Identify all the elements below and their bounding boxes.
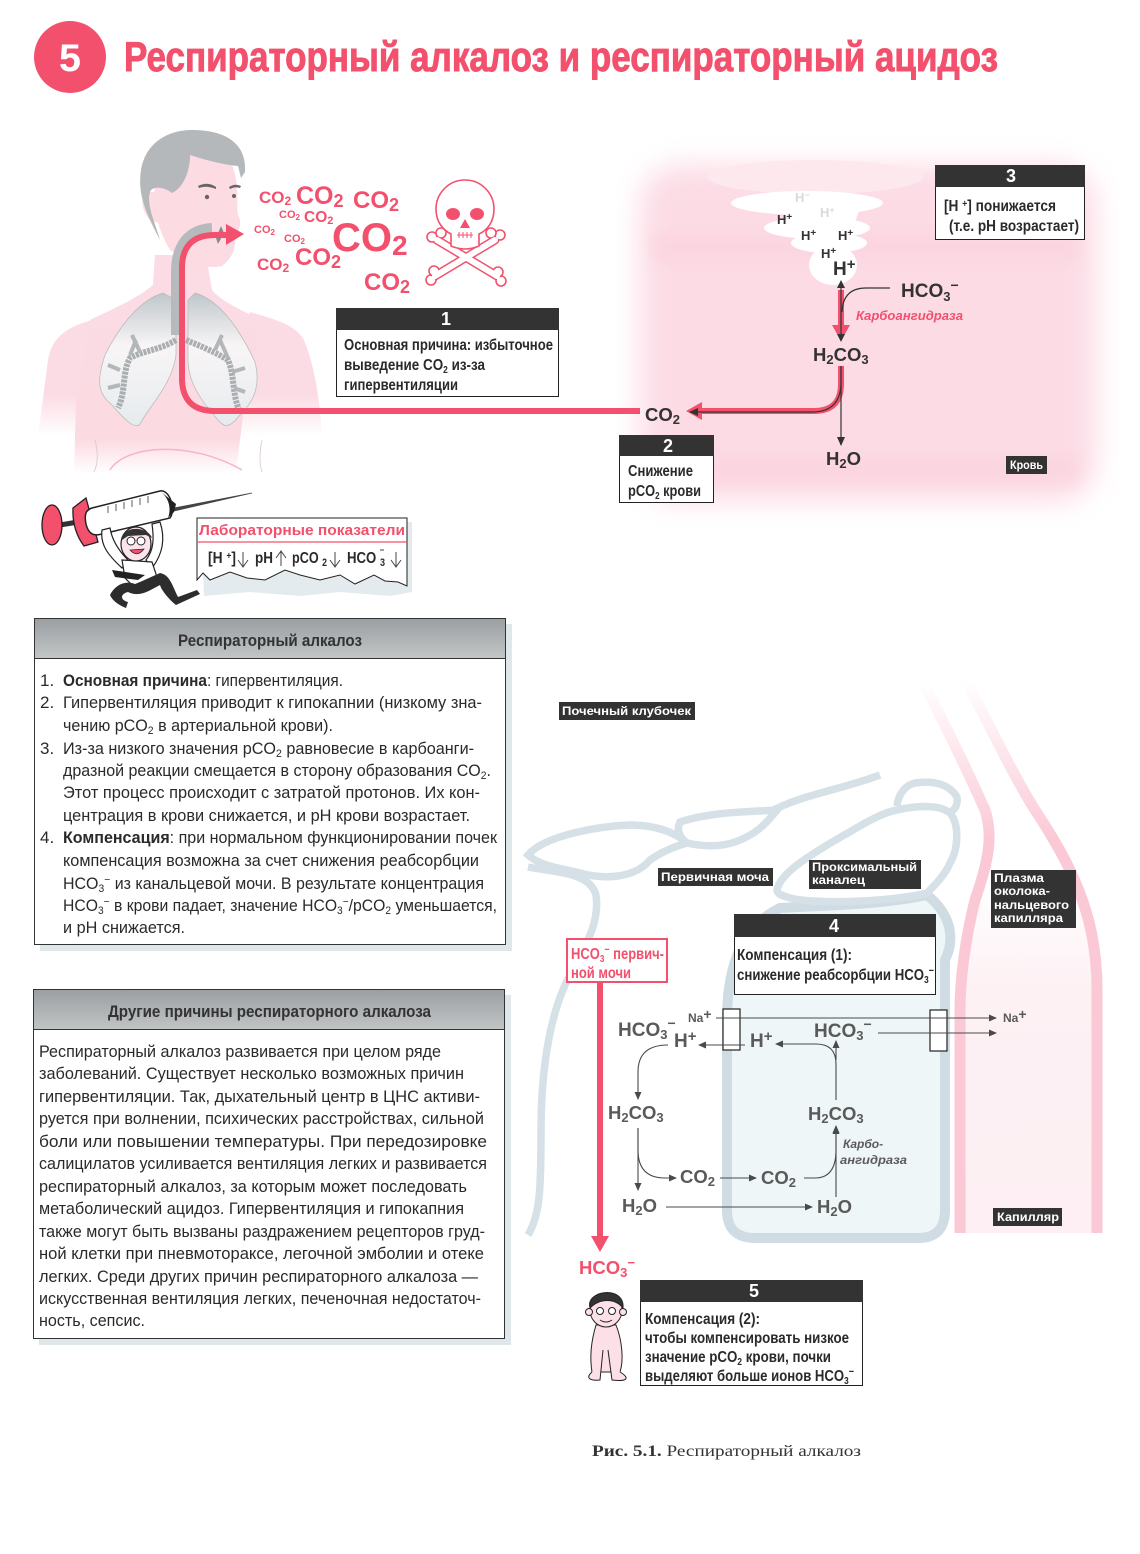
callout 3: + [962, 199, 967, 210]
cloud of CO2: CO [304, 209, 327, 226]
callout: primary urine bicarbonate: HCO [571, 946, 607, 963]
arms [38, 312, 322, 436]
kidney chemistry labels: H [608, 1102, 621, 1123]
callout 4 [734, 914, 936, 994]
callout 3: [H [944, 198, 961, 215]
CO2 blood: 2 [673, 412, 680, 427]
kidney chemistry labels: 2 [821, 1111, 829, 1126]
cloud of CO2: 2 [389, 195, 399, 215]
callout 3: 3 [1006, 166, 1016, 186]
list text: уменьшается, [391, 896, 497, 915]
bicarbonate HCO3: 3 [943, 289, 950, 304]
list text: и pH снижается. [63, 918, 185, 937]
callout 5: 2 [737, 1357, 742, 1368]
kidney chemistry labels: + [703, 1006, 712, 1022]
kidney chemistry labels: O [643, 1195, 657, 1216]
callout 1: 1 [441, 309, 451, 329]
face [154, 151, 240, 267]
callout 5: 3 [844, 1376, 849, 1387]
trachea and bronchi [108, 229, 245, 412]
H2O blood: 2 [839, 456, 847, 471]
label: primary urine: Первичная моча [661, 872, 770, 884]
cloud of CO2: CO [332, 216, 392, 260]
cloud of CO2: 2 [270, 228, 276, 237]
callout 1 [336, 308, 559, 396]
kidney chemistry labels: CO [761, 1167, 789, 1188]
callout 1: Основная причина: избыточное [344, 337, 553, 354]
list text: . [487, 761, 491, 780]
paragraph: боли или повышении температуры. При передозировке [39, 1132, 487, 1151]
small protons: H [795, 190, 804, 205]
callout 2: pCO [628, 483, 662, 500]
small protons: − [804, 190, 810, 200]
list text: 2 [481, 770, 487, 782]
callout 2 [619, 435, 714, 502]
arrow: urine bicarbonate excretion [591, 982, 609, 1252]
arrow: H2CO3 to H2O [840, 366, 842, 445]
kidney chemistry labels: CO [680, 1166, 708, 1187]
paragraph: Респираторный алкалоз развивается при целом ряде [39, 1042, 441, 1061]
label: blood: Кровь [1010, 460, 1043, 472]
callout 1: 2 [443, 365, 448, 376]
small protons: H [821, 246, 830, 261]
cloud of CO2: 2 [331, 252, 341, 272]
label: primary urine [658, 868, 773, 886]
kidney chemistry labels: 3 [856, 1111, 864, 1126]
callout 5: Компенсация (2): [645, 1311, 760, 1328]
small protons: + [830, 246, 836, 257]
cloud of CO2: CO [364, 269, 400, 296]
callout 4: снижение реабсорбции HCO [737, 967, 963, 984]
list text: 3 [337, 905, 343, 917]
kidney chemistry labels: Na [688, 1011, 703, 1025]
paragraph: легких. Среди других причин респираторного алкалоза — [39, 1267, 478, 1286]
urinary HCO3: 3 [620, 1265, 627, 1280]
paragraph: ной клетки при пневмотораксе, легочной эмболии и отеке [39, 1244, 484, 1263]
urinary HCO3: − [627, 1255, 635, 1270]
callout 4: 4 [829, 916, 839, 936]
cloud of CO2: 2 [284, 194, 292, 208]
list text: в крови падает, значение HCO [110, 896, 337, 915]
label: proximal tubule: Проксимальный [812, 862, 917, 874]
callout 5: чтобы компенсировать низкое [645, 1330, 849, 1347]
paragraph: гипервентиляции. Так, дыхательный центр в ЦНС активи- [39, 1087, 480, 1106]
label: proximal tubule [809, 860, 921, 889]
callout 1: гипервентиляции [344, 377, 458, 394]
list text: чению pCO [63, 716, 153, 735]
cloud of CO2: CO [296, 182, 334, 210]
cloud of CO2: 2 [334, 191, 344, 211]
tubule: first loop [528, 825, 687, 877]
cloud of CO2: CO [284, 233, 300, 245]
kidney chemistry labels: CO [629, 1102, 656, 1123]
kidney chemistry labels: 2 [789, 1175, 796, 1190]
callout 4: − [929, 965, 934, 977]
list text: 2 [148, 725, 154, 737]
eyes [198, 184, 241, 199]
list text: центрация в крови снижается, и pH крови возрастает. [63, 806, 470, 825]
tubule: left limb [528, 867, 597, 1235]
heading: Другие причины респираторного алкалоза [108, 1002, 431, 1021]
paragraph: салицилатов усиливается вентиляция легких и развивается [39, 1154, 487, 1173]
kidney chemistry labels: HCO [814, 1021, 856, 1042]
callout 5: выделяют больше ионов HCO [645, 1368, 887, 1385]
kidney chemistry labels: 2 [635, 1203, 643, 1218]
cloud of CO2: CO [259, 188, 284, 207]
list text: − [343, 896, 349, 908]
proton H+: + [847, 256, 856, 273]
tubule: rising limb [770, 775, 880, 812]
lab values text: + [226, 551, 232, 562]
panel: lab values: 3 [380, 557, 385, 569]
list text: 2 [276, 748, 282, 760]
callout 5: крови, почки [742, 1349, 831, 1366]
mouth [216, 226, 224, 244]
small protons: H [801, 228, 810, 243]
needle [174, 493, 252, 511]
tubule: top loop [897, 782, 957, 812]
list text: 3 [98, 883, 104, 895]
icon: tornado of protons [707, 160, 923, 285]
list text: 4. [40, 828, 54, 847]
paragraph: также могут быть вызваны раздражением рецепторов груд- [39, 1222, 485, 1241]
list text: 3. [40, 739, 54, 758]
list text: − [104, 896, 110, 908]
lungs [100, 293, 176, 426]
label: capillary [993, 1208, 1062, 1226]
list text: − [104, 874, 110, 886]
figure caption: Рис. 5.1. Респираторный алкалоз [592, 1443, 861, 1460]
urinary HCO3: HCO [579, 1257, 620, 1278]
head [121, 527, 151, 561]
callout 5: значение pCO [645, 1349, 756, 1366]
H2O blood: H [826, 448, 839, 469]
callout 5 [640, 1280, 863, 1387]
label: plasma: околока- [994, 886, 1050, 898]
icon: child [586, 1293, 626, 1381]
panel: lab values: HCO [347, 550, 383, 567]
lab figure: man carrying syringe [42, 491, 252, 608]
panel: lab values: 2 [322, 557, 327, 569]
callout: primary urine bicarbonate: 3 [600, 954, 605, 965]
small protons [777, 190, 853, 261]
kidney reaction arrows [638, 1018, 996, 1207]
list text: 1. [40, 671, 54, 690]
icon: chapter number 5 [34, 21, 106, 93]
list text: в артериальной крови). [154, 716, 333, 735]
cloud of CO2: 2 [282, 261, 290, 275]
cloud of CO2: 2 [400, 277, 410, 297]
lab values text: ] [231, 550, 236, 567]
cloud of CO2: 2 [296, 213, 300, 222]
kidney chemistry labels: H [622, 1195, 635, 1216]
callout 3: (т.е. pH возрастает) [949, 218, 1079, 235]
callout 2: 2 [655, 491, 660, 502]
arrow: H+ to H2CO3 [832, 280, 890, 342]
callout: primary urine bicarbonate: − [604, 944, 610, 956]
bicarbonate HCO3: − [950, 277, 959, 293]
kidney chemistry labels: 3 [856, 1028, 863, 1043]
lab values text: [H [208, 550, 225, 567]
label: blood [1006, 456, 1047, 474]
kidney chemistry labels: − [863, 1016, 872, 1032]
H2CO3: H [813, 344, 826, 365]
kidney chemistry labels: 2 [830, 1204, 838, 1219]
callout 5: 5 [749, 1281, 759, 1301]
label: plasma: нальцевого [994, 900, 1069, 912]
kidney chemistry labels: HCO [618, 1020, 660, 1041]
label: glomerulus [559, 702, 695, 720]
H2CO3: 2 [826, 352, 834, 367]
H2CO3: CO [834, 344, 861, 365]
kidney chemistry labels: H [817, 1196, 830, 1217]
panel: other causes [34, 990, 511, 1345]
panel: blood background [640, 165, 1096, 501]
list text: Этот процесс происходит с затратой протонов. Их кон- [63, 783, 480, 802]
barrel [85, 491, 172, 535]
list text: дразной реакции смещается в сторону образования CO [63, 761, 506, 780]
kidney chemistry labels: − [667, 1015, 676, 1031]
panel: lab values [197, 518, 412, 596]
paragraph: искусственная вентиляция легких, печеночная недостаточ- [39, 1289, 481, 1308]
callout 1: выведение CO [344, 357, 462, 374]
kidney chemistry labels: O [838, 1196, 852, 1217]
cloud of CO2: CO [279, 209, 296, 221]
small protons: H [838, 228, 847, 243]
small protons: H [820, 205, 829, 220]
callout 2: крови [660, 483, 701, 500]
small protons: + [829, 205, 835, 215]
callout 3 [935, 165, 1085, 240]
enzyme label: Карбоангидраза [856, 309, 963, 323]
paragraph: метаболический ацидоз. Гипервентиляция и гипокапния [39, 1199, 464, 1218]
list text: компенсация возможна за счет снижения реабсорбции [63, 851, 479, 870]
callout 4: Компенсация (1): [737, 947, 852, 964]
hair [140, 130, 245, 240]
arms [102, 528, 128, 568]
label: plasma [991, 870, 1076, 928]
icon: chapter number 5: 5 [59, 37, 81, 80]
cloud of CO2 [254, 182, 410, 297]
callout 5: − [849, 1366, 854, 1378]
list text: Гипервентиляция приводит к гипокапнии (низкому зна- [63, 693, 482, 712]
label: glomerulus: Почечный клубочек [562, 706, 691, 718]
kidney chemistry labels: CO [829, 1103, 856, 1124]
kidney chemistry labels: 3 [660, 1027, 667, 1042]
H2CO3: 3 [861, 352, 869, 367]
label: proximal tubule: каналец [812, 875, 865, 887]
torso [122, 560, 158, 590]
list text: 2 [385, 905, 391, 917]
icon: skull and crossbones [426, 180, 506, 286]
callout: primary urine bicarbonate [567, 939, 667, 982]
kidney chemistry labels: + [1018, 1006, 1027, 1022]
cloud of CO2: CO [254, 224, 270, 236]
cloud of CO2: CO [353, 187, 389, 214]
diaphragm [110, 449, 242, 470]
callout 2: Снижение [628, 463, 693, 480]
panel: lab values: pH [255, 550, 273, 567]
list text: Основная причина: гипервентиляция. [63, 671, 343, 690]
small protons: + [786, 212, 792, 223]
bicarbonate HCO3: HCO [901, 281, 943, 302]
panel: respiratory alkalosis [34, 618, 512, 951]
cloud of CO2: CO [295, 244, 331, 271]
tubule: jar cell [727, 895, 950, 1238]
list text: равновесие в карбоанги- [282, 739, 474, 758]
kidney chemistry labels: 2 [708, 1174, 715, 1189]
kidney chemistry labels: Карбо- [843, 1137, 883, 1151]
list text: HCO [63, 896, 101, 915]
kidney: capillary [922, 680, 1097, 1233]
kidney chemistry labels: ангидраза [840, 1153, 907, 1167]
proton H+: H [833, 259, 847, 280]
callout 3: ] понижается [967, 198, 1056, 215]
kidney chemistry labels: H [808, 1103, 821, 1124]
arrow: exhaled CO2 [182, 224, 640, 411]
kidney chemistry labels: H [674, 1031, 688, 1052]
kidney chemistry labels: Na [1003, 1011, 1018, 1025]
tubule: neck loop [777, 807, 957, 902]
small protons: + [810, 228, 816, 239]
kidney chemistry labels: 2 [621, 1110, 629, 1125]
kidney chemistry labels: + [688, 1028, 697, 1045]
paragraph: руется при волнении, психических расстройствах, сильной [39, 1109, 484, 1128]
kidney chemistry labels: + [764, 1028, 773, 1045]
kidney chemistry labels: H [750, 1031, 764, 1052]
label: plasma: Плазма [994, 873, 1045, 885]
cloud of CO2: CO [257, 255, 282, 274]
tie [112, 570, 145, 580]
kidney chemistry labels [608, 1006, 1027, 1219]
list text: HCO [63, 874, 101, 893]
paragraph: заболеваний. Существует несколько возможных причин [39, 1064, 464, 1083]
paragraph: респираторный алкалоз, за которым может последовать [39, 1177, 467, 1196]
cloud of CO2: 2 [327, 215, 333, 227]
list text: 2. [40, 693, 54, 712]
callout 1: из-за [448, 357, 485, 374]
small protons: H [777, 212, 786, 227]
list text: из канальцевой мочи. В результате концентрация [110, 874, 484, 893]
label: capillary: Капилляр [997, 1212, 1059, 1224]
transporters [723, 1009, 947, 1051]
arrow: H2CO3 to CO2 [686, 366, 841, 420]
H2O blood: O [847, 448, 861, 469]
small protons: + [847, 228, 853, 239]
callout: primary urine bicarbonate: ной мочи [571, 965, 631, 982]
figure: man with lungs [38, 130, 322, 472]
paragraph: ность, сепсис. [39, 1311, 145, 1330]
list text: 3 [98, 905, 104, 917]
torso [74, 255, 262, 472]
cloud of CO2: 2 [300, 237, 306, 246]
CO2 blood: CO [645, 404, 673, 425]
callout: primary urine bicarbonate: первич- [610, 946, 664, 963]
paragraph [39, 1042, 487, 1330]
list text [40, 671, 498, 937]
kidney: tubule [528, 775, 957, 1238]
lab title: Лабораторные показатели [199, 522, 405, 539]
kidney chemistry labels: 3 [656, 1110, 664, 1125]
list text: Из-за низкого значения pCO [63, 739, 287, 758]
list text: Компенсация: при нормальном функционировании почек [63, 828, 498, 847]
label: plasma: капилляра [994, 913, 1064, 925]
heading: Респираторный алкалоз [178, 631, 362, 650]
legs [110, 573, 200, 608]
plunger [60, 521, 84, 525]
tubule: second loop [678, 810, 777, 846]
list text: /pCO [349, 896, 385, 915]
callout 4: 3 [924, 975, 929, 986]
callout 2: 2 [663, 436, 673, 456]
panel: lab values: pCO [292, 550, 326, 567]
cloud of CO2: 2 [392, 230, 408, 261]
